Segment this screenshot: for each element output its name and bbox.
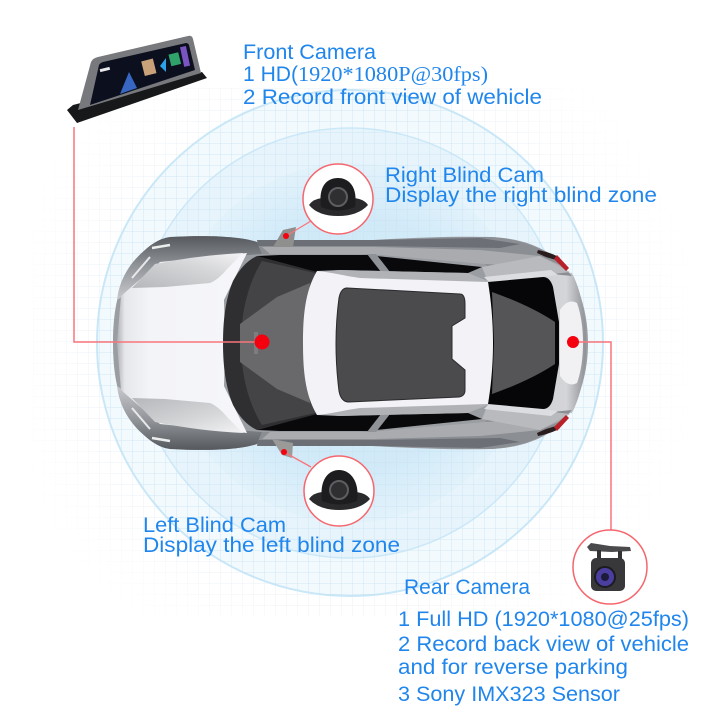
rear bumper highlight bbox=[560, 302, 583, 384]
red marker: left mirror bbox=[281, 449, 287, 455]
text: left blind cam: Left Blind Cam bbox=[143, 514, 286, 537]
text: front camera: 2 Record front view of wehicle bbox=[243, 86, 542, 109]
circle: left blind cam bbox=[304, 456, 374, 526]
red marker: right mirror bbox=[283, 233, 289, 239]
text: rear camera: and for reverse parking bbox=[398, 656, 628, 679]
text: right blind cam: Display the right blind zone bbox=[385, 184, 657, 207]
mirror right bbox=[273, 227, 296, 247]
text: rear camera bbox=[398, 576, 689, 706]
circle: rear camera bbox=[573, 530, 647, 604]
front camera connector bbox=[74, 127, 262, 342]
camera housing bbox=[591, 558, 625, 591]
lens bbox=[329, 188, 347, 206]
lens bbox=[330, 481, 348, 499]
text: right blind cam bbox=[385, 164, 657, 207]
text: right blind cam: Right Blind Cam bbox=[385, 164, 544, 187]
rear camera connector bbox=[573, 342, 611, 530]
camera dome bbox=[321, 470, 358, 504]
background grid bbox=[33, 88, 693, 616]
camera dome bbox=[320, 178, 356, 210]
posts bbox=[597, 550, 622, 559]
wiper mount bbox=[254, 332, 258, 354]
text: rear camera: Rear Camera bbox=[404, 576, 530, 599]
radar circles bbox=[97, 90, 603, 596]
text: left blind cam: Display the left blind zone bbox=[143, 534, 400, 557]
camera base bbox=[309, 198, 368, 216]
mirror left bbox=[272, 439, 293, 458]
upper half details bbox=[117, 236, 572, 343]
circle: right blind cam bbox=[303, 164, 373, 234]
text: front camera: 1920*1080P@30fps) bbox=[298, 62, 488, 86]
icon: dash cam mirror monitor bbox=[67, 36, 207, 123]
camera base bbox=[309, 492, 370, 510]
car top view bbox=[113, 227, 588, 458]
red marker: rear bbox=[567, 336, 579, 348]
mounting bracket bbox=[587, 543, 631, 552]
lens bbox=[595, 567, 615, 587]
text: rear camera: 2 Record back view of vehicle bbox=[398, 633, 689, 656]
sunroof bbox=[336, 288, 465, 402]
car body bbox=[113, 236, 588, 450]
text: left blind cam bbox=[143, 514, 400, 557]
text: front camera: 1 HD( bbox=[243, 63, 298, 86]
rear deck bbox=[488, 270, 586, 416]
red marker: front bbox=[254, 334, 270, 350]
mirror connectors bbox=[284, 221, 311, 467]
lower half details bbox=[117, 343, 572, 450]
text: rear camera: 1 Full HD (1920*1080@25fps) bbox=[398, 608, 689, 631]
text: front camera: Front Camera bbox=[243, 41, 376, 64]
text: rear camera: 3 Sony IMX323 Sensor bbox=[398, 683, 620, 706]
text: front camera bbox=[243, 41, 542, 109]
roof bbox=[303, 271, 493, 415]
